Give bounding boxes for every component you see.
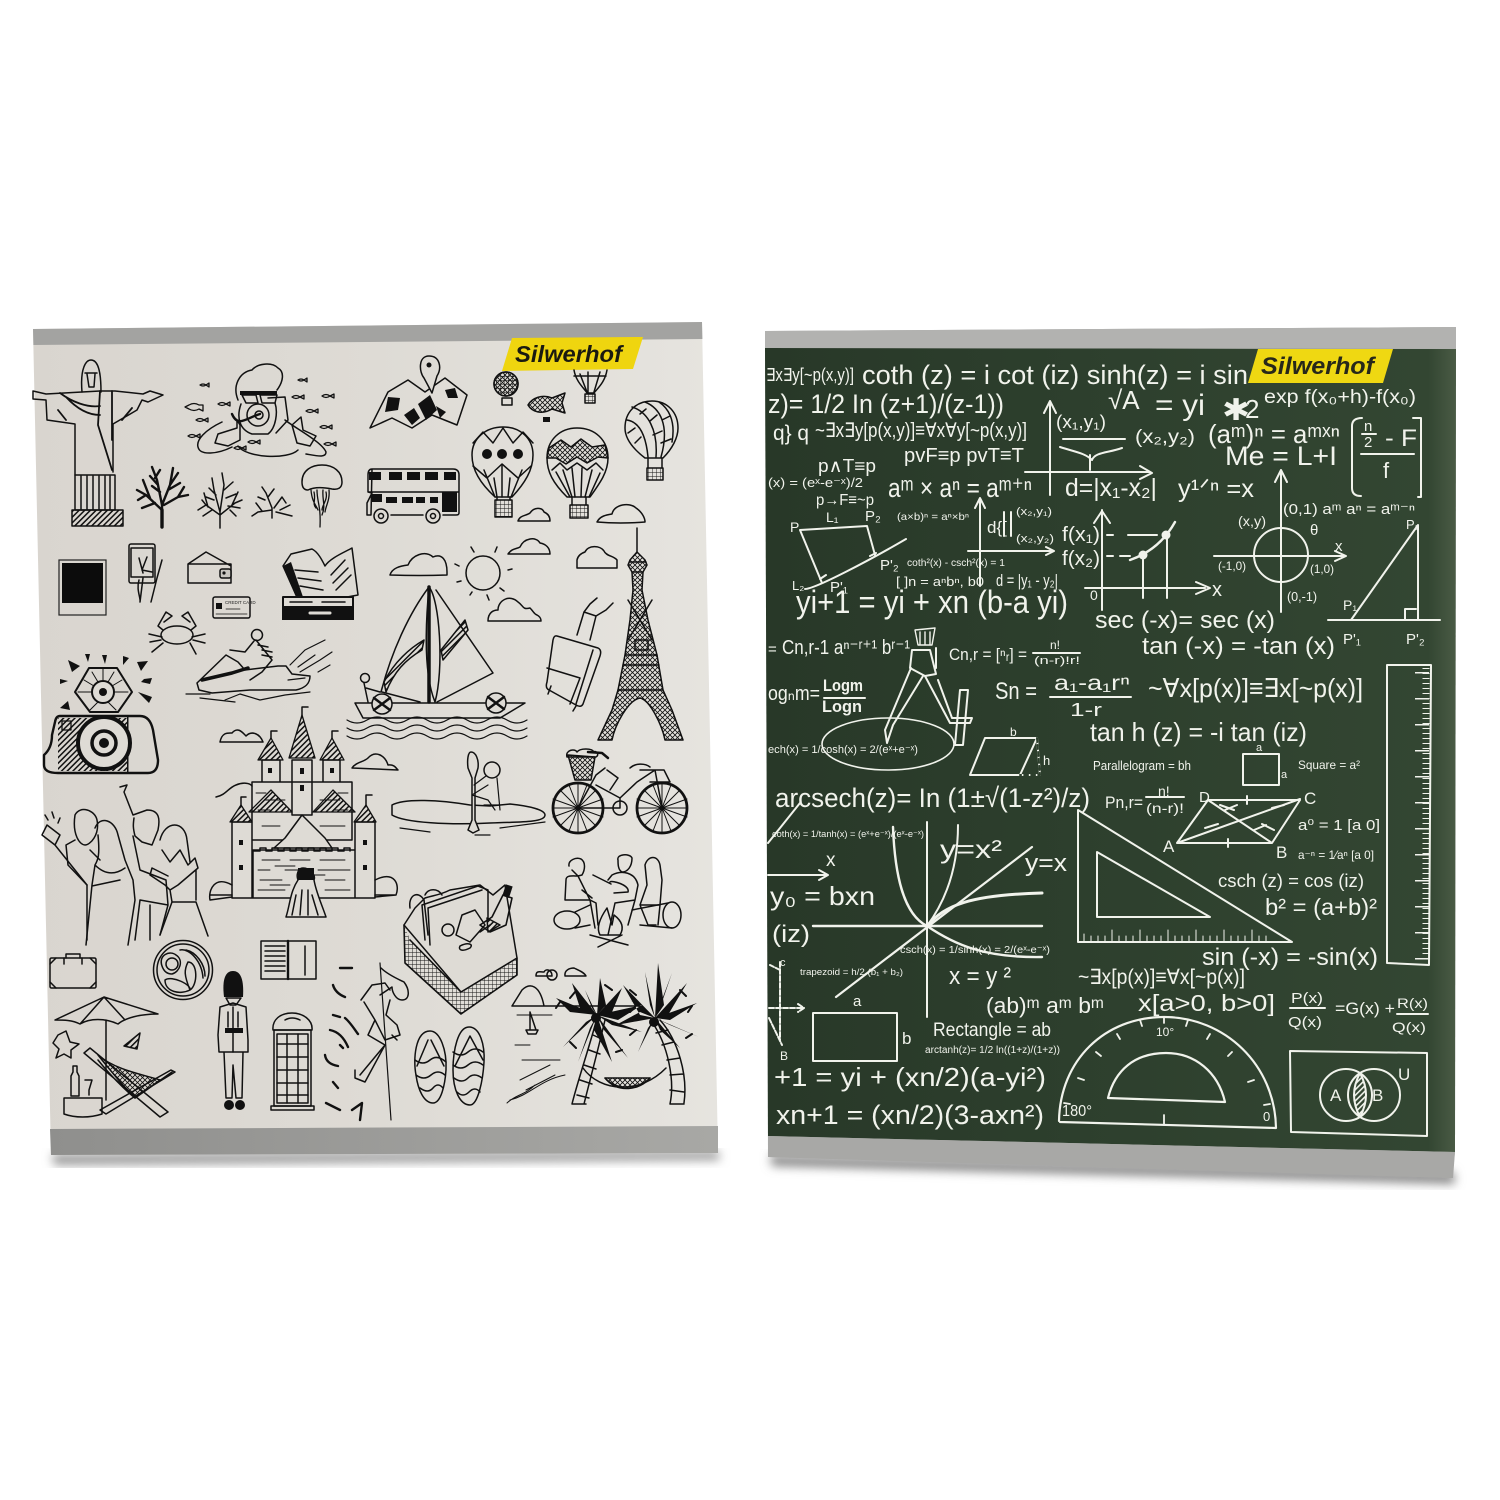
formulas: middle rows: Cn,r-1 aⁿ⁻ʳ⁺¹ bʳ⁻¹ xyxy=(782,637,910,659)
formulas: middle rows: a₁-a₁rⁿ xyxy=(1054,672,1130,695)
formulas: middle rows: = xyxy=(768,641,777,658)
formulas: right of triangle: sin (-x) = -sin(x) xyxy=(1202,944,1378,971)
icon: kayak and paddler xyxy=(392,752,545,835)
icon: picnic basket xyxy=(404,884,517,1014)
formulas: lower left: ~∃x[p(x)]≡∀x[~p(x)] xyxy=(1078,966,1245,989)
formulas: upper right: (aᵐ)ⁿ = aᵐˣⁿ xyxy=(1208,419,1340,449)
diagram: parallelogram xyxy=(970,725,1050,775)
formula bracket: n/2 - F over f xyxy=(1352,418,1421,497)
formulas: upper right: = yi xyxy=(1155,389,1205,422)
chart: unit circle: θ xyxy=(1310,522,1318,539)
icon: polaroid photo xyxy=(59,560,106,615)
formulas: top rows: ∃x∃y[~p(x,y)] xyxy=(766,365,854,385)
formulas: upper right: exp f(x₀+h)-f(x₀) xyxy=(1264,387,1416,408)
chart: function graph f(x1) f(x2): 0 xyxy=(1090,587,1098,603)
chart: function graph f(x1) f(x2): f(x₂) xyxy=(1062,548,1100,570)
diagram: square: a xyxy=(1256,742,1263,754)
icon: hand holding phone xyxy=(129,544,162,602)
formulas: lower left: x[a>0, b>0] xyxy=(1138,990,1275,1016)
chart: parabola and line graph xyxy=(768,803,1067,1017)
formulas: top rows: yi+1 = yi + xn (b-a yi) xyxy=(796,584,1068,620)
formulas: top rows: (x₂,y₂) xyxy=(1016,533,1054,545)
formulas: upper right: f xyxy=(1383,458,1390,483)
formulas: middle rows: Cn,r = [ⁿᵣ] = xyxy=(949,645,1027,664)
icon: retro camera xyxy=(44,716,158,773)
formulas: right of triangle: a⁻ⁿ = 1⁄aⁿ [a 0] xyxy=(1298,848,1374,862)
icon: castle clouds xyxy=(216,730,398,797)
chart: unit circle: x xyxy=(1335,538,1343,555)
formulas: middle rows: ogₙm= xyxy=(768,683,820,705)
icon: fairy tale castle xyxy=(210,707,397,917)
formulas: middle rows: ech(x) = 1/cosh(x) = 2/(eˣ+e⁻ˣ) xyxy=(768,744,918,756)
icon: hot air balloons and fish xyxy=(472,370,678,518)
icon: sailboat with waves xyxy=(347,587,527,739)
diagram: perpendicular projection xyxy=(800,526,906,589)
formulas: middle rows: (n-r)!r! xyxy=(1034,655,1080,667)
diagram: protractor: 10° xyxy=(1156,1025,1174,1039)
chart: parabola and line graph: y=x² xyxy=(940,834,1002,864)
formulas: lower left: (iz) xyxy=(772,921,810,948)
formulas: middle rows: (n-r)! xyxy=(1146,800,1184,816)
formulas: middle rows: Sn = xyxy=(995,678,1037,705)
formulas: upper right: (0,1) aᵐ aⁿ = aᵐ⁻ⁿ xyxy=(1283,501,1415,518)
formulas: top rows: coth²(x) - csch²(x) = 1 xyxy=(907,558,1005,569)
formulas: top rows: [ ]n = aⁿbⁿ, b0 xyxy=(896,575,984,589)
diagram: protractor: 0 xyxy=(1263,1109,1270,1124)
formulas: top rows: d = |y₁ - y₂| xyxy=(996,571,1058,590)
formulas: upper right: - F xyxy=(1385,425,1417,452)
formulas: top rows: pvF≡p pvT≡T xyxy=(904,445,1024,467)
formulas: top rows: P'₂ xyxy=(880,557,899,574)
formulas: middle rows: n! xyxy=(1158,783,1170,799)
chart: parabola and line graph: x xyxy=(826,850,836,871)
formulas: lower left: Q(x) xyxy=(1288,1014,1322,1031)
diagram: rectangle a b xyxy=(813,1013,897,1061)
formulas: lower left xyxy=(770,881,1428,1130)
formulas: upper right: ✱ xyxy=(1222,394,1250,427)
logo: Silwerhof yellow label xyxy=(502,337,643,371)
icon: wallet and credit card: CREDIT CARD xyxy=(225,600,256,605)
logo: Silwerhof yellow label: Silwerhof xyxy=(515,341,624,367)
chart: parabola and line graph: y=x xyxy=(1025,850,1067,877)
formulas: lower left: a xyxy=(853,993,862,1010)
formulas: middle rows: tan h (z) = -i tan (iz) xyxy=(1090,717,1307,747)
icon: folded map with pin xyxy=(370,356,467,428)
icon: clouds xyxy=(390,505,645,621)
formulas: upper right: 2 xyxy=(1245,394,1259,424)
chart: function graph f(x1) f(x2): x xyxy=(1212,579,1222,601)
formulas: upper right: Me = L+I xyxy=(1225,441,1337,471)
formulas: upper right: d=|x₁-x₂| xyxy=(1065,474,1157,502)
formulas: right of triangle xyxy=(1202,817,1380,971)
diagram: parallelogram ABCD: D xyxy=(1199,789,1210,806)
logo: Silwerhof yellow label xyxy=(1248,349,1393,383)
diagram: parallelogram ABCD: A xyxy=(1163,837,1175,856)
icon: double decker bus xyxy=(367,469,459,523)
icon: Christ the Redeemer statue xyxy=(33,360,163,526)
diagram: parallelogram: b xyxy=(1010,725,1017,739)
formulas: upper right: 2 xyxy=(1364,434,1372,451)
diagram: Venn diagram xyxy=(1290,1051,1427,1136)
formulas: lower left: +1 = yi + (xn/2)(a-yi²) xyxy=(774,1062,1046,1092)
icon: scuba diver with fish xyxy=(185,364,336,456)
formulas: upper right: y¹ᐟⁿ =x xyxy=(1178,475,1255,503)
diagram: square: a xyxy=(1281,769,1288,781)
diagram: vector arrows: B xyxy=(780,1049,788,1063)
formulas: middle rows: sec (-x)= sec (x) xyxy=(1095,607,1275,634)
formulas: top rows: p→F≡~p xyxy=(816,492,874,509)
diagram: right triangle with projection: P₂ xyxy=(1406,517,1420,532)
formulas: lower left: xn+1 = (xn/2)(3-axn²) xyxy=(776,1100,1044,1130)
icon: camera flash xyxy=(60,654,152,712)
formulas: lower left: (ab)ᵐ aᵐ bᵐ xyxy=(986,993,1104,1018)
formulas: lower left: Rectangle = ab xyxy=(933,1020,1051,1041)
chart: coordinate axes x1 x2 xyxy=(1025,401,1152,495)
notebook: maths chalkboard xyxy=(765,327,1456,1184)
diagram: right triangle with projection: P'₁ xyxy=(1343,631,1361,648)
icon: open book stack xyxy=(282,548,358,620)
icon: London phone booth xyxy=(271,1013,314,1110)
formulas: upper right: √A xyxy=(1108,385,1140,415)
formulas: top rows: z)= 1/2 In (z+1)/(z-1)) xyxy=(768,389,1004,419)
formulas: right of triangle: csch (z) = cos (iz) xyxy=(1218,871,1364,891)
formulas: top rows: P xyxy=(790,519,799,535)
formulas: lower left: trapezoid = h/2 (b₁ + b₂) xyxy=(800,967,903,977)
formulas: lower left: y₀ = bxn xyxy=(770,881,875,911)
formulas: top rows: p∧T≡p xyxy=(818,456,876,476)
chart: unit circle: (x,y) xyxy=(1238,513,1266,529)
notebook: travel doodles xyxy=(33,322,720,1165)
diagram: parallelogram ABCD xyxy=(1163,789,1316,862)
diagram: parallelogram ABCD: C xyxy=(1304,789,1316,808)
icon: jet ski xyxy=(186,630,332,702)
formulas: right of triangle: b² = (a+b)² xyxy=(1265,894,1377,920)
formulas: top rows: L₂ xyxy=(792,578,804,593)
formulas: middle rows: tan (-x) = -tan (x) xyxy=(1142,633,1335,660)
formulas: middle rows: 1-r xyxy=(1070,700,1102,720)
icon: campfire friends xyxy=(554,855,681,947)
icon: coral trees and jellyfish xyxy=(137,465,342,528)
formulas: top rows: q} q xyxy=(773,422,809,445)
icon: beach scene with palm trees and hammock xyxy=(507,963,699,1104)
icon: friends taking selfie xyxy=(42,785,208,945)
diagram: right triangle with projection xyxy=(1328,517,1440,648)
diagram: parallelogram: h xyxy=(1043,753,1050,768)
formulas: middle rows: ~∀x[p(x)]≡∃x[~p(x)] xyxy=(1148,673,1363,703)
formulas: lower left: P(x) xyxy=(1291,990,1323,1007)
icon: rock climber xyxy=(325,963,408,1120)
diagram: parallelogram ABCD: B xyxy=(1276,843,1287,862)
diagram: protractor xyxy=(1059,1017,1276,1128)
formulas: top rows xyxy=(766,360,1248,620)
diagram: right triangle with projection: P'₂ xyxy=(1406,631,1425,648)
icon: bicycle with flower basket xyxy=(553,749,687,833)
formulas: lower left: csch(x) = 1/sinh(x) = 2/(eˣ-e⁻ˣ) xyxy=(900,944,1050,956)
formulas: top rows: L₁ xyxy=(826,509,839,525)
formulas: middle rows xyxy=(768,607,1363,840)
formulas: lower left: b xyxy=(902,1029,911,1048)
chart: unit circle xyxy=(1214,470,1346,612)
formulas: right of triangle: a⁰ = 1 [a 0] xyxy=(1298,817,1380,834)
formulas: lower left: x = y ² xyxy=(949,963,1011,990)
icon: ruler xyxy=(1387,665,1431,965)
formulas: middle rows: arcsech(z)= In (1±√(1-z²)/z) xyxy=(775,783,1090,813)
icon: breakfast plate xyxy=(154,940,212,1000)
icon: flip flops xyxy=(415,1027,484,1105)
formulas: top rows: (x) = (eˣ-e⁻ˣ)/2 xyxy=(768,475,863,490)
formulas: middle rows: n! xyxy=(1050,638,1060,652)
formulas: top rows: (a×b)ⁿ = aⁿ×bⁿ xyxy=(897,511,969,523)
icon: organizer notebook xyxy=(261,941,316,979)
fraction bars xyxy=(824,653,1184,797)
chart: unit circle: (1,0) xyxy=(1310,562,1334,576)
formulas: top rows: coth (z) = i cot (iz) sinh(z) = i sin xyxy=(862,360,1248,390)
formulas: top rows: d{[ xyxy=(987,518,1007,537)
formulas: middle rows: Logm xyxy=(823,676,863,695)
icon: Eiffel Tower xyxy=(598,528,683,740)
diagram: Venn diagram: A xyxy=(1330,1086,1342,1105)
formulas: upper right: n xyxy=(1364,418,1372,435)
icon: royal guard xyxy=(218,971,248,1110)
formulas: upper right: (x₂,y₂) xyxy=(1135,427,1195,448)
formulas: middle rows: Square = a² xyxy=(1298,758,1360,772)
formulas: top rows: aᵐ × aⁿ = aᵐ⁺ⁿ xyxy=(888,473,1032,503)
formulas: lower left: arctanh(z)= 1/2 ln((1+z)/(1+z)) xyxy=(925,1045,1060,1056)
formulas: lower left: =G(x) + xyxy=(1335,999,1395,1018)
diagram: Venn diagram: B xyxy=(1372,1086,1383,1105)
diagram: protractor: 180° xyxy=(1062,1103,1092,1120)
formulas: lower left: Q(x) xyxy=(1392,1019,1426,1035)
formulas: middle rows: Logn xyxy=(822,697,862,716)
diagram: Venn diagram: U xyxy=(1398,1065,1410,1084)
formulas: lower left: R(x) xyxy=(1397,995,1428,1011)
chart: unit circle: (-1,0) xyxy=(1218,559,1246,573)
icon: rolling suitcase xyxy=(546,598,613,711)
diagram: vector arrows xyxy=(769,957,804,1063)
icon: drawing compass xyxy=(822,628,972,770)
logo: Silwerhof yellow label: Silwerhof xyxy=(1261,353,1376,380)
chart: function graph f(x1) f(x2) xyxy=(1062,510,1222,610)
diagram: set square triangle xyxy=(1078,810,1292,942)
chart: coordinate axes x1 x2: (x₁,y₁) xyxy=(1056,412,1106,432)
diagram: right triangle with projection: P₁ xyxy=(1343,597,1357,613)
formulas: middle rows: Parallelogram = bh xyxy=(1093,758,1191,773)
diagram: vector arrows: c xyxy=(780,957,786,969)
icon: wallet and credit card xyxy=(188,552,256,618)
chart: distance axes xyxy=(968,498,1054,586)
diagram: square xyxy=(1243,742,1288,785)
icon: sun xyxy=(455,547,512,600)
formulas: top rows: P'₁ xyxy=(830,579,848,596)
chart: unit circle: (0,-1) xyxy=(1287,589,1317,604)
formulas: middle rows: Pn,r= xyxy=(1105,793,1143,812)
fraction bars and rational function xyxy=(1290,1008,1428,1014)
formulas: top rows: ~∃x∃y[p(x,y)]≡∀x∀y[~p(x,y)] xyxy=(815,420,1027,442)
formulas: top rows: P₂ xyxy=(865,508,881,525)
formulas: middle rows: coth(x) = 1/tanh(x) = (eˣ+e⁻ˣ)/(eˣ-e⁻ˣ) xyxy=(772,829,924,840)
chart: function graph f(x1) f(x2): f(x₁) xyxy=(1062,524,1100,546)
icon: briefcase xyxy=(50,954,96,988)
icon: crab xyxy=(149,612,205,654)
formulas: upper right xyxy=(1065,385,1417,518)
formulas: top rows: (x₂,y₁) xyxy=(1016,506,1052,518)
icon: parasol and deck chair xyxy=(53,997,175,1117)
